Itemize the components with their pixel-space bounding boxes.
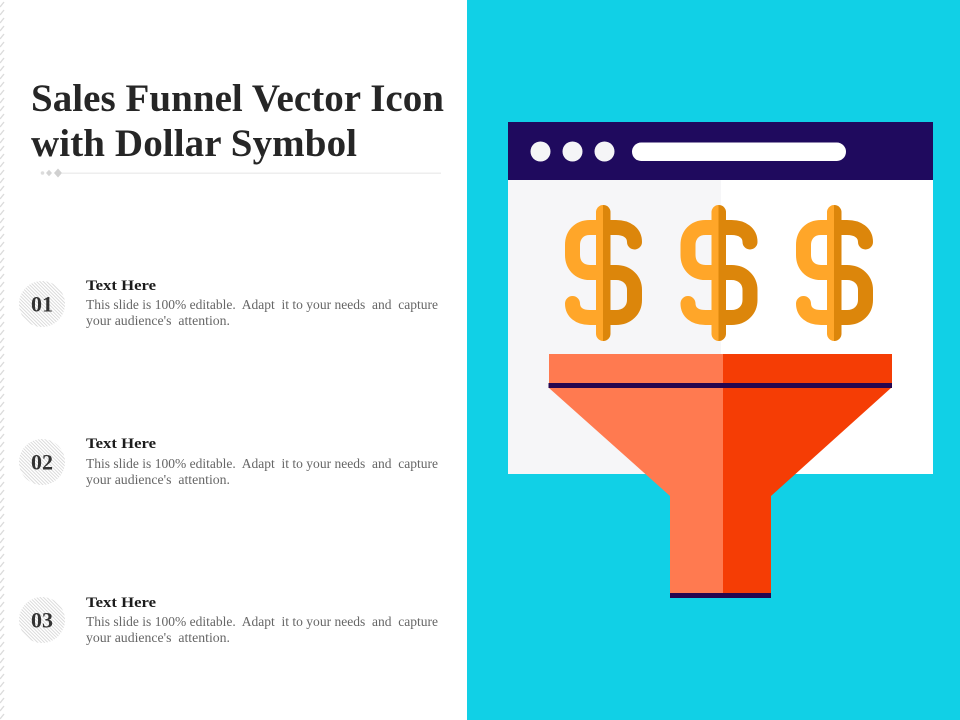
title: with Dollar Symbol bbox=[31, 122, 357, 165]
item heading 03: Text Here bbox=[86, 595, 157, 611]
browser window bbox=[508, 122, 933, 474]
number badge 01 bbox=[19, 281, 65, 327]
number badge 03: 03 bbox=[31, 608, 53, 632]
icon: dollar 2 bbox=[688, 205, 750, 341]
item body 02: This slide is 100% editable. Adapt it to your needs and capture bbox=[86, 456, 438, 471]
item body 03: your audience's attention. bbox=[86, 630, 230, 645]
browser title bar bbox=[508, 122, 933, 180]
item body 03: This slide is 100% editable. Adapt it to your needs and capture bbox=[86, 614, 438, 629]
icon: dollar 1 bbox=[572, 205, 634, 341]
item body 01: This slide is 100% editable. Adapt it to your needs and capture bbox=[86, 297, 438, 312]
icon: funnel bbox=[548, 354, 892, 598]
panel: cyan background bbox=[467, 0, 960, 720]
list item 02 bbox=[19, 436, 438, 487]
list item 03 bbox=[19, 595, 438, 645]
number badge 03 bbox=[19, 597, 65, 643]
item heading 02: Text Here bbox=[86, 436, 157, 452]
item body 01: your audience's attention. bbox=[86, 313, 230, 328]
title divider bbox=[41, 168, 441, 178]
number badge 02: 02 bbox=[31, 450, 53, 474]
item body 02: your audience's attention. bbox=[86, 472, 230, 487]
icon: dollar 3 bbox=[804, 205, 866, 341]
number badge 02 bbox=[19, 439, 65, 485]
item body 03 bbox=[86, 614, 438, 645]
title bbox=[31, 77, 444, 165]
item heading 01: Text Here bbox=[86, 278, 157, 294]
item body 02 bbox=[86, 456, 438, 487]
list item 01 bbox=[19, 278, 438, 328]
title: Sales Funnel Vector Icon bbox=[31, 77, 444, 120]
item body 01 bbox=[86, 297, 438, 328]
number badge 01: 01 bbox=[31, 292, 53, 316]
